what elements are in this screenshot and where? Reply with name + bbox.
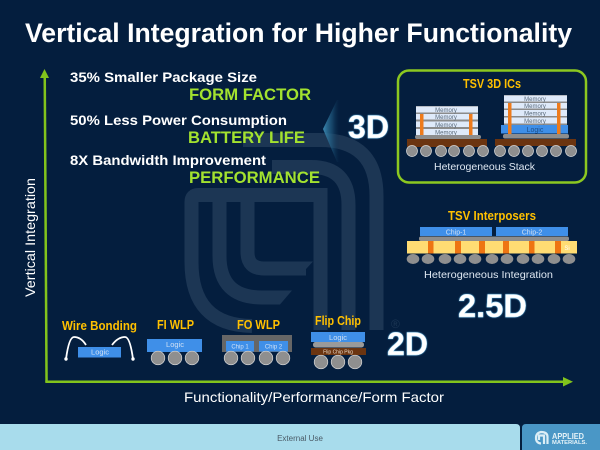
logo word: applied: APPLIED [552,431,584,441]
benefit: power: 50% Less Power Consumption [70,112,287,128]
diagram: flip chip [311,314,366,369]
label: form factor: FORM FACTOR [189,86,311,104]
footer logo panel [522,424,600,450]
chips [419,227,569,241]
logic die with wires: Logic [91,348,109,356]
two chips with balls: Chip 2 [265,344,283,350]
panel: TSV interposers [407,209,577,281]
right memory on logic stack: Logic [527,127,544,134]
vertical axis arrow [40,69,49,382]
right memory on logic stack [501,95,569,138]
heading: TSV 3D ICs: TSV 3D ICs [463,77,521,91]
right memory on logic stack: Memory [524,112,546,118]
two chips with balls: Chip 1 [231,344,249,350]
heading: FO WLP: FO WLP [237,318,280,332]
two chips with balls [222,335,292,365]
benefit: package size: 35% Smaller Package Size [70,69,257,85]
label: 2.5D: 2.5D [458,288,527,324]
logo word: materials: MATERIALS. [552,440,588,446]
label: battery life: BATTERY LIFE [188,129,305,147]
right package substrate and balls [494,139,576,156]
diagram: FI WLP [147,318,202,365]
right memory on logic stack: Memory [524,104,546,110]
heading: FI WLP: FI WLP [157,318,194,332]
x axis label: Functionality/Performance/Form Factor [184,389,444,405]
label: 2D: 2D [387,326,428,362]
flip chip stack: Flip Chip Pkg [323,350,353,356]
logo icon [536,432,548,444]
heading: TSV Interposers: TSV Interposers [448,209,536,223]
benefit: bandwidth: 8X Bandwidth Improvement [70,152,266,168]
silicon interposer [407,241,577,254]
left memory stack [415,106,481,139]
flip chip stack: Logic [329,333,347,342]
diagram: wire bonding [62,319,137,361]
silicon interposer: Si [564,246,570,252]
diagram: FO WLP [222,318,292,365]
left memory stack: Memory [435,123,457,129]
left memory stack: Memory [435,115,457,121]
footer bar [0,424,520,450]
arrow pointer to 3D [323,100,340,162]
caption: heterogeneous integration: Heterogeneous Integration [424,269,553,281]
flip chip stack [311,332,366,369]
label: performance: PERFORMANCE [189,169,320,187]
panel: TSV 3D ICs [398,70,586,182]
label: 3D: 3D [348,109,389,145]
right memory on logic stack: Memory [524,97,546,103]
y axis label: Vertical Integration [22,178,38,297]
footer text: External Use [277,434,323,443]
title: Vertical Integration for Higher Functionality [25,18,572,48]
registered mark: ® [391,317,400,331]
heading: wire bonding: Wire Bonding [62,319,137,333]
heading: flip chip: Flip Chip [315,314,361,328]
left memory stack: Memory [435,130,457,136]
watermark logo [192,140,376,330]
left memory stack: Memory [435,108,457,114]
caption: heterogeneous stack: Heterogeneous Stack [434,161,536,173]
chips: Chip-2 [522,230,542,236]
right memory on logic stack: Memory [524,119,546,125]
left package substrate and balls [406,139,488,156]
logic die with balls: Logic [166,340,184,349]
solder balls [407,254,575,264]
chips: Chip-1 [446,230,466,236]
horizontal axis arrow [45,377,573,386]
